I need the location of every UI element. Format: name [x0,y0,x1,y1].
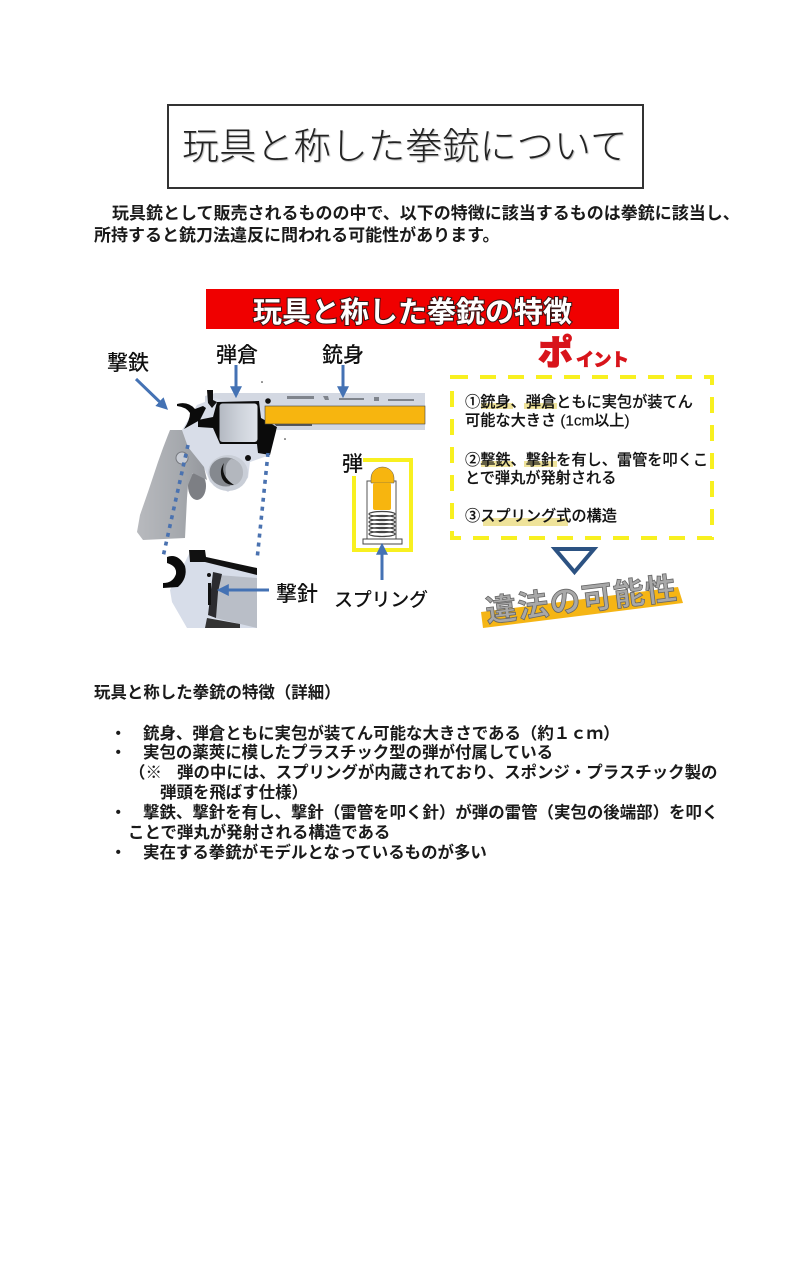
title: 玩具と称した拳銃について [182,126,627,167]
arrow: firing pin [221,588,269,592]
label: firing pin: 撃針 [276,583,318,606]
finger notch shade [188,472,206,500]
label: spring: スプリング [334,589,428,611]
point box: ①銃身、弾倉ともに実包が装てん [465,393,693,411]
details list: 実在する拳銃がモデルとなっているものが多い [143,844,487,862]
specks [261,381,263,383]
point box: とで弾丸が発射される [465,469,616,487]
bullet diagram [354,460,411,550]
arrow: cylinder [234,365,238,394]
illegal possibility banner: 違法の可能性 [484,571,678,629]
trigger guard [208,455,248,491]
label: bullet: 弾 [342,453,363,476]
grip [137,430,207,540]
details list: ことで弾丸が発射される構造である [128,824,390,842]
point box [452,377,712,538]
point box: 可能な大きさ (1cm以上) [465,412,630,430]
details list: 実包の薬莢に模したプラスチック型の弾が付属している [143,744,553,762]
revolver illustration [137,381,425,540]
red banner heading: 玩具と称した拳銃の特徴 [253,296,572,329]
arrow: hammer [136,379,165,407]
details list: （※ [129,764,162,782]
dotted guide lines [163,445,268,560]
label: cylinder: 弾倉 [216,344,258,367]
point heading [538,334,629,373]
frame [182,398,277,492]
triangle marker [555,549,594,572]
details list: 撃鉄、撃針を有し、撃針（雷管を叩く針）が弾の雷管（実包の後端部）を叩く [143,804,718,822]
details list: 弾頭を飛ばす仕様） [160,784,308,802]
intro text [94,204,740,245]
rear sight [207,390,217,408]
details list: ・ [110,744,126,762]
intro text: 玩具銃として販売されるものの中で、以下の特徴に該当するものは拳銃に該当し、 [112,204,740,223]
details heading: 玩具と称した拳銃の特徴（詳細） [94,684,341,702]
details list: ・ [110,725,126,743]
point heading: イント [576,350,629,370]
arrow: barrel [342,365,344,394]
intro text: 所持すると銃刀法違反に問われる可能性があります。 [94,226,499,245]
title [167,104,644,189]
red banner heading [206,289,619,329]
details list: ・ [110,804,126,822]
details list: 銃身、弾倉ともに実包が装てん可能な大きさである（約１ｃｍ） [143,725,620,743]
enlarged firing pin view [163,550,257,628]
details list: ・ [110,844,126,862]
arrow: spring [380,547,384,580]
cylinder [198,401,277,455]
point heading: ポ [538,334,573,373]
label: barrel: 銃身 [322,344,364,367]
label: hammer: 撃鉄 [107,351,149,375]
yellow bore [265,406,425,424]
point box: ②撃鉄、撃針を有し、雷管を叩くこ [465,451,708,469]
point box: ③スプリング式の構造 [465,507,617,525]
hammer [177,403,206,429]
barrel [205,393,425,430]
details list: 弾の中には、スプリングが内蔵されており、スポンジ・プラスチック製の [177,764,717,782]
details list [110,724,718,862]
